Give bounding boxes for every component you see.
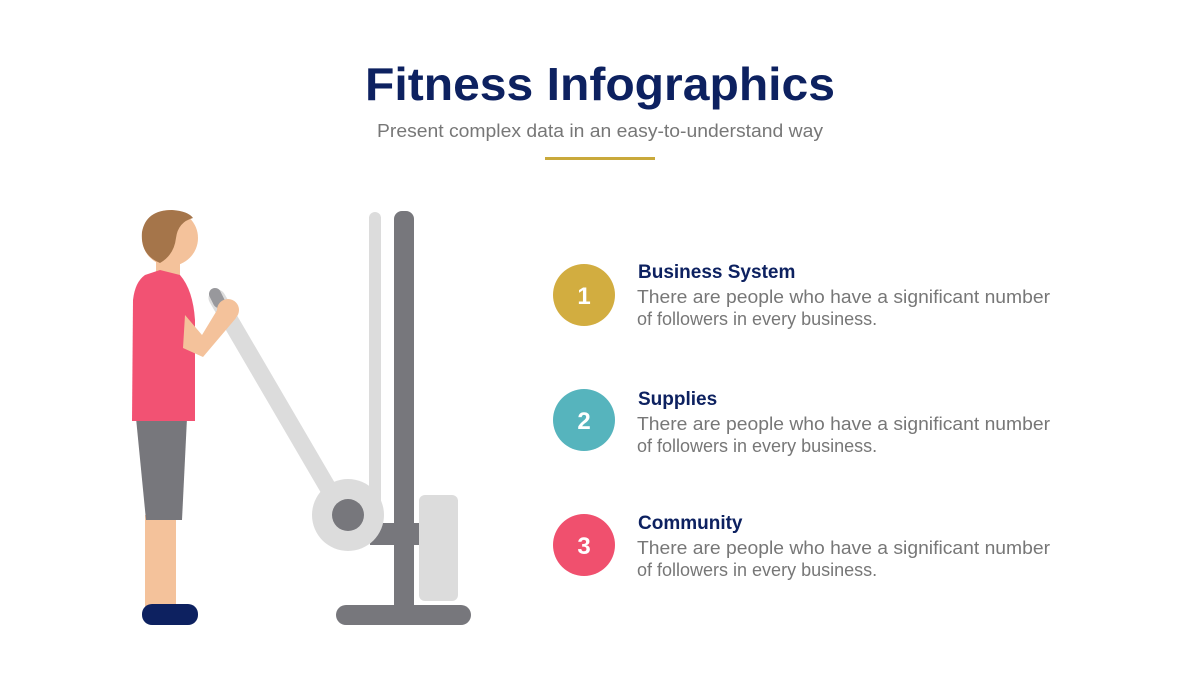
machine: dark post <box>394 211 414 613</box>
illustration: person at cable machine <box>132 210 471 625</box>
badge 1 <box>553 264 615 326</box>
body 1: There are people who have a significant number <box>637 287 1050 307</box>
item 3: Community: 3 <box>577 533 591 560</box>
item 3: Community: of followers in every business. <box>637 560 877 580</box>
item 1: Business System <box>553 262 1050 329</box>
title: Fitness Infographics <box>365 58 835 110</box>
body 3: There are people who have a significant number <box>637 538 1050 558</box>
person: shirt <box>132 270 195 421</box>
item 2: Supplies <box>553 389 1050 456</box>
person: legs <box>145 515 176 610</box>
machine: base <box>336 605 471 625</box>
machine: pulley <box>312 479 384 551</box>
underline accent <box>545 157 655 160</box>
machine: handle bar <box>217 298 342 512</box>
heading 1: Business System <box>638 262 795 283</box>
body 2: There are people who have a significant number <box>637 414 1050 434</box>
item 2: Supplies: 2 <box>577 408 591 435</box>
item 1: Business System: of followers in every business. <box>637 309 877 329</box>
person: head <box>142 210 198 266</box>
heading 2: Supplies <box>638 389 717 410</box>
heading 3: Community <box>638 513 743 534</box>
machine: weight stack <box>419 495 458 601</box>
badge 2 <box>553 389 615 451</box>
badge 3 <box>553 514 615 576</box>
machine: crossbar <box>370 523 422 545</box>
item 1: Business System: 1 <box>577 283 591 310</box>
item 3: Community <box>553 513 1050 580</box>
person: neck <box>156 255 180 280</box>
machine: light rope <box>369 212 381 512</box>
person: arm <box>183 302 236 357</box>
item 2: Supplies: of followers in every business. <box>637 436 877 456</box>
subtitle: Present complex data in an easy-to-understand way <box>377 121 823 141</box>
person: shoe <box>142 604 198 625</box>
person: shorts <box>136 418 187 520</box>
